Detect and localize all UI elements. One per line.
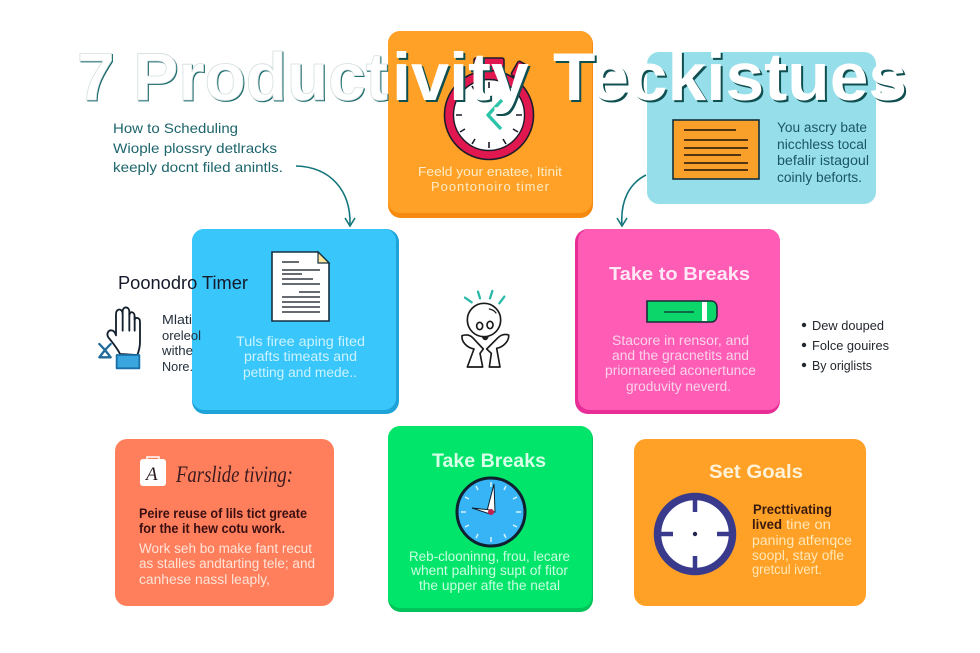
- text: cyan card copy: You ascry bate: [777, 120, 867, 135]
- text: pink card copy: Stacore in rensor, and: [612, 333, 749, 348]
- text: scheduling intro: How to Scheduling: [113, 120, 238, 136]
- text: hand notes: [161, 312, 201, 374]
- text: coral light copy: canhese nassl leaply,: [139, 572, 270, 587]
- panel: blue document card: [192, 229, 399, 414]
- text: coral light copy: as stalles andtarting tele; and: [139, 556, 315, 571]
- text: coral light copy: Work seh bo make fant recut: [139, 541, 312, 556]
- title: Teckistues: [553, 39, 907, 115]
- text: blue card copy: [236, 334, 365, 380]
- title: ivity: [392, 39, 529, 115]
- text: goals copy: [752, 502, 852, 577]
- text: green card copy: the upper afte the netal: [419, 578, 560, 593]
- text: scheduling intro: [113, 120, 283, 175]
- text: blue card copy: prafts timeats and: [244, 349, 357, 364]
- panel: pink breaks card: [575, 229, 780, 414]
- panel: coral focus card: [115, 439, 334, 606]
- icon: happy head: [462, 291, 509, 367]
- text: orange card caption: Poontonoiro timer: [431, 179, 550, 194]
- title: 7 Product: [77, 39, 388, 115]
- heading: Set Goals: Set Goals: [709, 462, 803, 483]
- bullet list: Folce gouires: [812, 338, 889, 353]
- text: pink card copy: groduvity neverd.: [626, 379, 731, 394]
- icon: letter A tag: [140, 457, 166, 486]
- bullet list: [802, 318, 889, 373]
- icon: green pen: [647, 301, 717, 322]
- text: hand notes: Mlati: [162, 312, 192, 327]
- icon: target: [658, 496, 732, 572]
- text: goals copy: Precttivating: [753, 502, 832, 517]
- panel: cyan notes card: [647, 52, 876, 204]
- text: green card copy: Reb-clooninng, frou, lecare: [409, 549, 570, 564]
- text: goals copy: paning atfenqce: [752, 533, 852, 548]
- text: pink card copy: and the gracnetits and: [612, 348, 749, 363]
- arrow: cyan card to pink card: [617, 175, 646, 226]
- heading: Pomodoro timer: Poonodro Timer: [118, 273, 248, 293]
- panel: green breaks card: [388, 426, 593, 612]
- icon: notes sheet: [673, 120, 759, 179]
- text: coral dark copy: Peire reuse of lils tict greate: [139, 506, 307, 521]
- text: hand notes: withe: [161, 343, 193, 358]
- text: hand notes: oreleol: [162, 328, 201, 343]
- text: coral dark copy: for the it hew cotu work.: [139, 521, 285, 536]
- text: goals copy: tine on: [786, 517, 831, 532]
- bullet list: By origlists: [812, 358, 872, 373]
- text: green card copy: whent palhing supt of fitor: [410, 563, 569, 578]
- heading: Take to Breaks: Take to Breaks: [609, 263, 750, 284]
- text: pink card copy: [605, 333, 756, 394]
- panel: orange goals card: [634, 439, 866, 606]
- icon: document: [272, 252, 329, 321]
- text: cyan card copy: befalir istagoul: [777, 153, 869, 168]
- text: green card copy: [409, 549, 570, 593]
- bullet list: Dew douped: [812, 318, 884, 333]
- text: goals copy: lived: [752, 517, 782, 532]
- text: scheduling intro: Wiople plossry detlracks: [113, 140, 277, 156]
- text: pink card copy: priornareed aconertunce: [605, 363, 756, 378]
- text: coral dark copy: [139, 506, 307, 536]
- icon: stopwatch: [444, 58, 534, 160]
- heading: Take Breaks: Take Breaks: [432, 451, 546, 472]
- text: goals copy: soopl, stay ofle: [752, 548, 844, 563]
- icon: raised hand: [99, 307, 140, 368]
- text: cyan card copy: nicchless tocal: [777, 137, 867, 152]
- text: blue card copy: Tuls firee aping fited: [236, 334, 365, 349]
- text: orange card caption: Feeld your enatee, Itinit: [418, 164, 562, 179]
- icon: letter A tag: A: [144, 464, 158, 485]
- text: cyan card copy: [777, 120, 869, 185]
- text: goals copy: gretcul ivert.: [752, 562, 822, 577]
- icon: wall clock: [457, 478, 525, 546]
- text: cyan card copy: coinly beforts.: [777, 170, 862, 185]
- heading: handwritten title: Farslide tiving:: [175, 462, 293, 487]
- text: scheduling intro: keeply docnt filed anintls.: [113, 159, 283, 175]
- text: coral light copy: [139, 541, 315, 587]
- text: hand notes: Nore.: [162, 359, 193, 374]
- arrow: intro to blue card: [296, 166, 355, 226]
- panel: orange timer card: [388, 31, 593, 218]
- text: blue card copy: petting and mede..: [243, 365, 357, 380]
- text: orange card caption: [418, 164, 562, 194]
- title: [77, 39, 907, 115]
